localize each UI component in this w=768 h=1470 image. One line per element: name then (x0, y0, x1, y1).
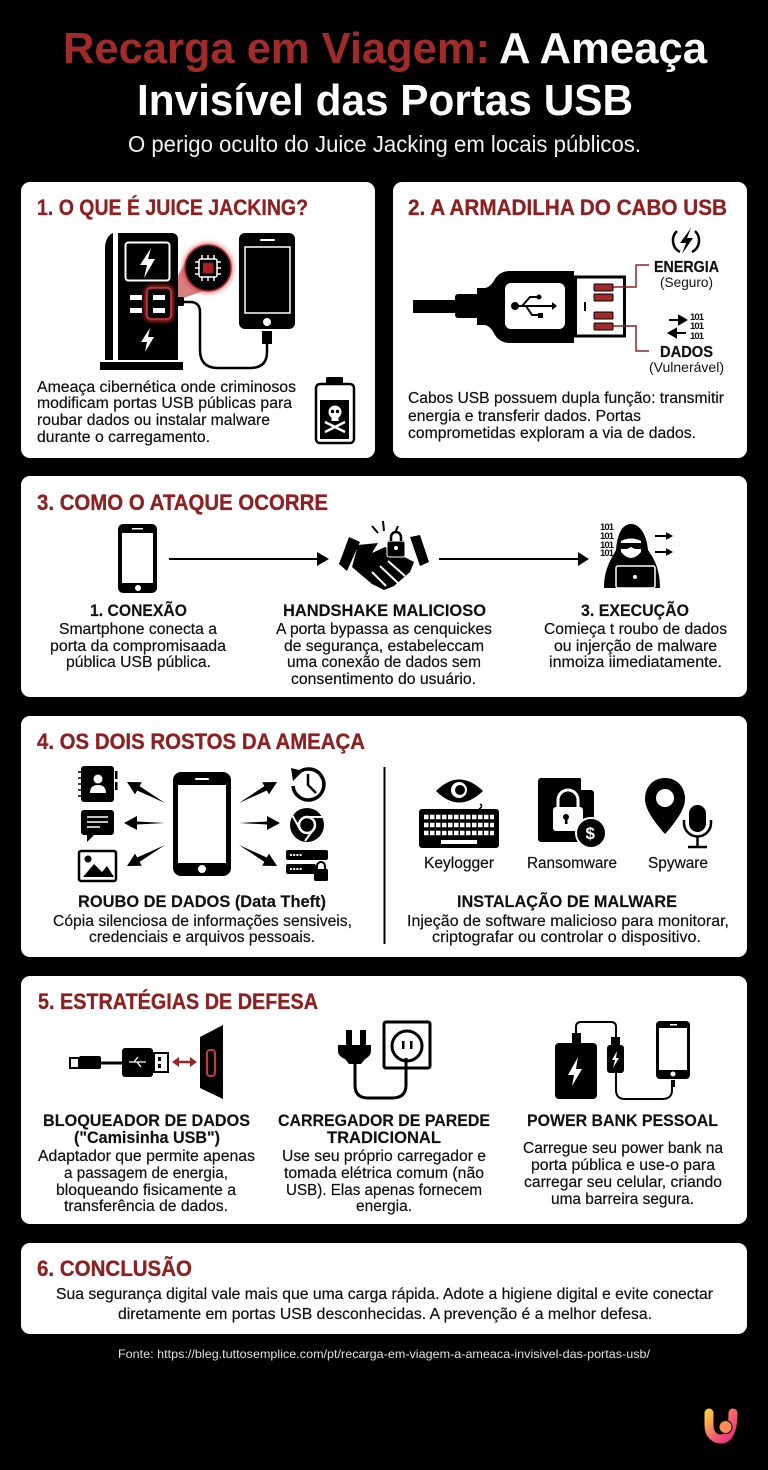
defense 1 text: transferência de dados. (64, 1198, 228, 1215)
panel: 4. Os dois rostos da ameaça (21, 716, 747, 957)
defense 3 text: uma barreira segura. (551, 1191, 694, 1208)
body text 1: roubar dados ou instalar malware (37, 412, 270, 429)
step 2 text: HANDSHAKE MALICIOSO (283, 601, 486, 620)
heading 1: 1. O QUE É JUICE JACKING? (37, 195, 308, 220)
icon: message (81, 810, 114, 842)
icon: contacts notebook (78, 766, 118, 802)
title (63, 24, 708, 125)
icon: location and microphone (645, 778, 711, 847)
icon: power bank (555, 1021, 690, 1099)
step 3 text: 3. EXECUÇÃO (581, 600, 689, 620)
icon: wall charger (338, 1022, 430, 1098)
icon: central phone (173, 772, 231, 876)
icon: hacker: 101 (600, 531, 615, 542)
data theft text: ROUBO DE DADOS (Data Theft) (78, 892, 326, 911)
label: energia (654, 259, 719, 290)
defense 2 text: CARREGADOR DE PAREDE (278, 1111, 490, 1130)
icon: compromised chip (185, 245, 231, 291)
defense 3 text: Carregue seu power bank na (523, 1140, 723, 1157)
body text 1: Ameaça cibernética onde criminosos (37, 379, 296, 396)
data theft text (53, 892, 352, 946)
icon: password lock (286, 850, 328, 881)
defense 1 text: Adaptador que permite apenas (38, 1148, 255, 1165)
arrow: connection to handshake (169, 552, 329, 566)
heading 6: 6. CONCLUSÃO (37, 1256, 192, 1281)
defense 2 text (278, 1111, 490, 1215)
icon: USB cable (413, 265, 649, 351)
malware text (407, 891, 729, 946)
icon: charging kiosk (100, 233, 206, 370)
body text 1 (37, 379, 296, 446)
title: Invisível das Portas USB (137, 76, 633, 125)
conclusion text: Sua segurança digital vale mais que uma carga rápida. Adote a higiene digital e evite conectar (56, 1286, 713, 1303)
icon: data transfer: 101 (690, 331, 705, 342)
arrow: handshake to execution (439, 552, 589, 566)
icon: energy bolt (673, 228, 699, 254)
defense 1 text: a passagem de energia, (64, 1165, 228, 1182)
panel: 2. A armadilha do cabo USB (393, 182, 747, 458)
defense 1 text: ("Camisinha USB") (74, 1128, 220, 1147)
defense 2 text: Use seu próprio carregador e (282, 1148, 486, 1165)
icon: USB data blocker (70, 1025, 223, 1099)
icon: data transfer: 101 (690, 312, 705, 323)
step 1 text: Smartphone conecta a (59, 621, 217, 638)
malware text: criptografar ou controlar o dispositivo. (432, 929, 701, 946)
step 3 text (544, 600, 727, 671)
icon: handshake with lock (339, 521, 429, 590)
conclusion text (56, 1286, 713, 1323)
malware type labels: Spyware (648, 855, 708, 872)
heading 5: 5. ESTRATÉGIAS DE DEFESA (38, 989, 318, 1014)
panel: 1. O que é Juice Jacking (21, 182, 375, 458)
heading 3: 3. COMO O ATAQUE OCORRE (37, 490, 328, 515)
malware type labels (424, 855, 708, 872)
heading 4: 4. OS DOIS ROSTOS DA AMEAÇA (37, 729, 365, 754)
step 3 text: inmoiza iimediatamente. (549, 654, 722, 671)
arrows: data leaving the phone to the right (239, 782, 280, 866)
step 2 text: A porta bypassa as cenquickes (276, 621, 492, 638)
icon: brand logo (709, 1413, 733, 1439)
step 1 text: 1. CONEXÃO (90, 600, 187, 620)
defense 3 text: POWER BANK PESSOAL (527, 1111, 718, 1130)
step 2 text (276, 601, 492, 688)
label: dados: DADOS (660, 344, 713, 361)
defense 2 text: USB). Elas apenas fornecem (286, 1182, 482, 1199)
malware text: Injeção de software malicioso para monitorar, (407, 913, 729, 930)
label: energia: ENERGIA (654, 259, 719, 276)
title: A Ameaça (499, 24, 708, 73)
icon: picture (79, 851, 116, 881)
body text 2: comprometidas exploram a via de dados. (408, 425, 696, 442)
defense 2 text: energia. (356, 1198, 412, 1215)
defense 2 text: TRADICIONAL (327, 1128, 441, 1147)
step 2 text: consentimento do usuário. (291, 671, 476, 688)
arrows: data leaving the phone to the left (124, 782, 165, 866)
body text 2: Cabos USB possuem dupla função: transmitir (408, 390, 724, 407)
icon: hacker: 101 (600, 540, 615, 551)
icon: data transfer: 101 (690, 321, 705, 332)
label: energia: (Seguro) (660, 274, 713, 290)
icon: keylogger (419, 780, 499, 848)
body text 1: modificam portas USB públicas para (37, 395, 292, 412)
step 1 text: pública USB pública. (66, 654, 211, 671)
defense 1 text (38, 1111, 255, 1215)
icon: charging cable (175, 297, 272, 368)
step 3 text: Comieça t roubo de dados (544, 621, 727, 638)
panel: 5. Estratégias de defesa (21, 976, 747, 1224)
body text 2: energia e transferir dados. Portas (408, 408, 641, 425)
icon: hacker (600, 522, 673, 588)
source line: Fonte: https://bleg.tuttosemplice.com/pt/recarga-em-viagem-a-ameaca-invisivel-das-portas-usb/ (118, 1347, 651, 1361)
step 2 text: de segurança, estabeleccam (284, 638, 484, 655)
defense 1 text: BLOQUEADOR DE DADOS (43, 1111, 250, 1130)
heading 2: 2. A ARMADILHA DO CABO USB (408, 195, 727, 220)
malware type labels: Keylogger (424, 855, 494, 872)
step 1 text (50, 600, 226, 671)
icon: smartphone (118, 524, 157, 593)
data theft text: credenciais e arquivos pessoais. (89, 929, 315, 946)
icon: ransomware (538, 778, 606, 848)
icon: ransomware: $ (586, 824, 596, 843)
label: dados (649, 344, 724, 375)
icon: data transfer (669, 312, 705, 342)
defense 3 text: carregar seu celular, criando (524, 1174, 722, 1191)
panel: 6. Conclusão (21, 1243, 747, 1334)
step 2 text: uma conexão de dados sem (287, 654, 481, 671)
data theft text: Cópia silenciosa de informações sensiveis, (53, 913, 352, 930)
icon: history (291, 768, 324, 800)
body text 2 (408, 390, 724, 442)
defense 3 text: porta pública e use-o para (531, 1157, 715, 1174)
panel: 3. Como o ataque ocorre (21, 476, 747, 697)
title: Recarga em Viagem: (63, 24, 490, 73)
icon: battery with skull (316, 377, 354, 443)
icon: phone (239, 233, 295, 329)
malware text: INSTALAÇÃO DE MALWARE (457, 891, 677, 911)
step 1 text: porta da compromisaada (50, 638, 226, 655)
label: dados: (Vulnerável) (649, 359, 724, 375)
subtitle: O perigo oculto do Juice Jacking em locais públicos. (128, 131, 641, 157)
icon: browser (290, 808, 324, 842)
body text 1: durante o carregamento. (37, 429, 210, 446)
icon: hacker: 101 (600, 522, 615, 533)
icon: hacker: 101 (600, 548, 615, 559)
defense 3 text (523, 1111, 723, 1208)
conclusion text: diretamente em portas USB desconhecidas. A prevenção é a melhor defesa. (118, 1306, 652, 1323)
malware type labels: Ransomware (527, 855, 617, 872)
defense 1 text: bloqueando fisicamente a (56, 1182, 236, 1199)
step 3 text: ou injerção de malware (554, 638, 717, 655)
defense 2 text: tomada elétrica comum (não (284, 1165, 484, 1182)
